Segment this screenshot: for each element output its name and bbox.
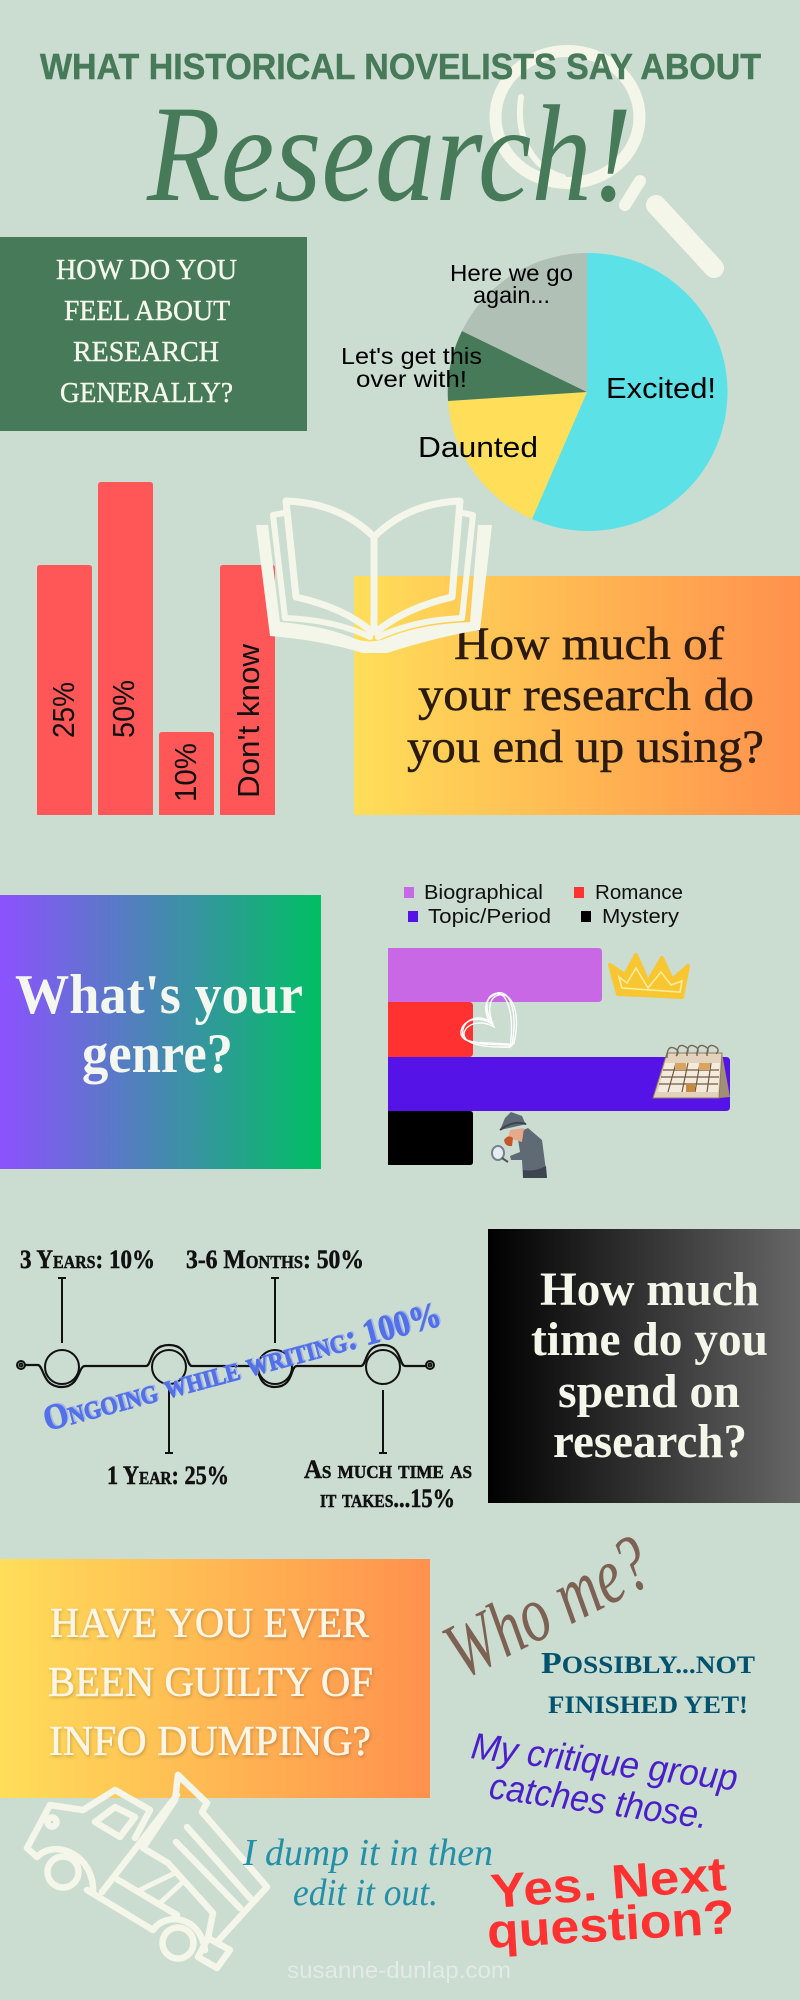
timeline labels: As much time as [304,1455,472,1484]
quote: possibly not finished: FINISHED YET! [548,1692,748,1719]
quote: yes next question [485,1848,736,1959]
panel: how do you feel: FEEL ABOUT [64,295,230,327]
panel: how much research used [354,576,800,815]
panel: how do you feel: RESEARCH [73,336,219,368]
panel: how much time: spend on [558,1365,740,1418]
quote: possibly not finished: POSSIBLY...NOT [541,1645,755,1680]
panel: how much time: time do you [531,1313,768,1366]
quote: dump it in: edit it out. [293,1872,438,1914]
legend: genres: Mystery [602,906,679,928]
title [40,46,761,230]
legend: genres: Romance [595,882,683,904]
pie chart: feelings about research: Here we go [450,260,573,286]
timeline labels [20,1245,472,1513]
pie chart: feelings about research: again... [473,282,550,308]
panel: info dumping: BEEN GUILTY OF [48,1660,373,1706]
pie chart: feelings about research: over with! [356,366,467,392]
timeline labels: it takes...15% [320,1484,455,1513]
quote: yes next question: Yes. Next [489,1848,728,1919]
panel: how much time [488,1229,800,1503]
panel: what's your genre: What's your [15,964,303,1026]
panel: what's your genre [0,895,321,1169]
panel: info dumping: HAVE YOU EVER [50,1601,369,1647]
panel: how much time: research? [553,1415,747,1468]
pie chart: feelings about research: Let's get this [341,343,482,369]
panel: info dumping [0,1559,430,1798]
bar chart: research used: Don't know [231,643,266,798]
panel: how much research used: your research do [418,669,754,721]
pie chart: feelings about research: Daunted [418,432,538,464]
icon: magnifying glass [496,51,714,268]
callout: ongoing while writing: Ongoing while writing: 100% [39,1294,445,1439]
panel: how do you feel: HOW DO YOU [56,254,237,286]
quote: dump it in: I dump it in then [242,1832,493,1874]
title: Research! [146,77,632,230]
legend: genres [404,882,683,928]
footer url: susanne-dunlap.com [287,1957,511,1983]
bar chart: genres [388,948,730,1165]
icon: calendar [653,1045,730,1098]
quote: yes next question: question? [485,1891,736,1959]
bar chart: research used: 50% [106,680,141,738]
legend: genres: Biographical [424,882,543,904]
bar chart: research used: 10% [168,743,203,802]
quote: critique group: catches those. [487,1765,710,1837]
panel: how much research used: you end up using? [407,721,764,773]
quote: possibly not finished [541,1645,755,1719]
quote: who me: Who me? [430,1519,664,1696]
timeline [17,1278,434,1453]
icon: detective [492,1112,547,1178]
callout: ongoing while writing: Ongoing while writing: 100% [40,1292,447,1437]
timeline labels: 3 Years: 10% [20,1245,155,1274]
pie chart: feelings about research [341,253,727,531]
icon: heart [461,993,516,1047]
icon: crown [610,955,688,997]
panel: what's your genre: genre? [82,1023,233,1085]
pie chart: feelings about research: Excited! [606,373,716,405]
panel: how do you feel: GENERALLY? [60,377,233,409]
panel: info dumping: INFO DUMPING? [49,1719,371,1765]
quote: critique group: My critique group [469,1725,740,1799]
icon: open book [256,501,492,653]
quote: dump it in [242,1832,493,1914]
legend: genres: Topic/Period [428,906,551,928]
panel: how much time: How much [540,1263,759,1316]
bar chart: research used: 25% [46,682,81,738]
quote: critique group [469,1725,740,1837]
timeline labels: 1 Year: 25% [107,1461,229,1490]
bar chart: research used [37,482,275,815]
title: WHAT HISTORICAL NOVELISTS SAY ABOUT [40,46,761,87]
panel: how do you feel [0,237,307,431]
panel: how much research used: How much of [454,618,724,670]
icon: dump truck [27,1775,267,1968]
timeline labels: 3-6 Months: 50% [186,1245,364,1274]
